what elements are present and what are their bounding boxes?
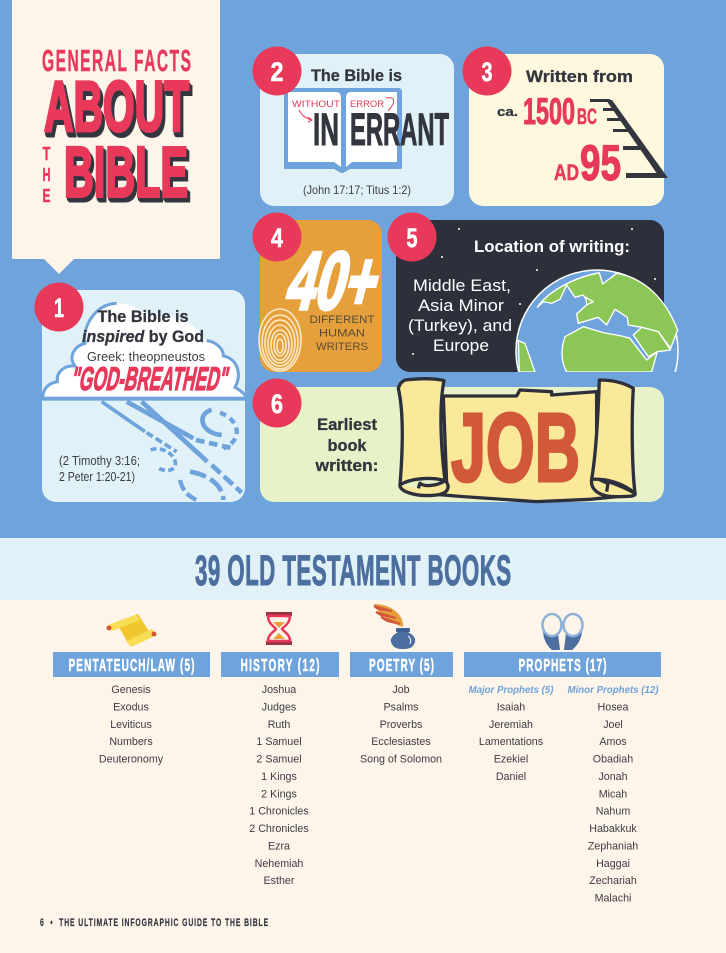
scroll illustration [398, 379, 635, 502]
list: pentateuch books: Exodus [113, 701, 149, 713]
column header: prophets [464, 652, 661, 677]
list: major prophets: Daniel [496, 771, 526, 783]
list: minor prophets: Joel [603, 719, 623, 731]
list: history books: Ezra [268, 840, 290, 852]
panel 6: earliest book [252, 378, 664, 502]
badge 4 [252, 212, 302, 262]
list: pentateuch books: Leviticus [110, 719, 152, 731]
list: minor prophets: Minor Prophets (12) [568, 684, 659, 696]
locations: (Turkey), and [408, 316, 512, 335]
list: major prophets: Lamentations [479, 736, 543, 748]
label [314, 415, 378, 475]
without error handwriting [292, 98, 394, 122]
heading: inspired by God [82, 327, 204, 346]
background: cream lower section [0, 600, 726, 953]
inerrant: IN [313, 104, 339, 155]
end date: AD [554, 160, 579, 185]
list: poetry books: Song of Solomon [360, 754, 442, 766]
cloud illustration [42, 303, 247, 401]
list: poetry books: Psalms [383, 701, 419, 713]
different human writers [310, 314, 375, 353]
greek term: Greek: theopneustos [87, 349, 205, 364]
badge 1 [34, 282, 84, 332]
list: poetry books: Ecclesiastes [371, 736, 431, 748]
list: major prophets: Major Prophets (5) [468, 684, 554, 696]
icon: fingerprint [259, 309, 301, 371]
list: pentateuch books: Genesis [111, 684, 151, 696]
list: minor prophets: Jonah [598, 771, 628, 783]
panel 3: written from [462, 46, 668, 206]
without error handwriting: ERROR [350, 99, 384, 110]
list: poetry books [360, 684, 442, 766]
title: bible [64, 134, 191, 217]
title: bible: BIBLE [66, 137, 190, 216]
title: general facts: GENERAL FACTS [42, 44, 191, 79]
list: history books: Esther [264, 875, 295, 887]
locations: Middle East, [413, 276, 511, 295]
list: history books: Joshua [262, 684, 296, 696]
title panel [12, 0, 220, 274]
badge 1: 1 [54, 293, 64, 323]
list: minor prophets: Zephaniah [588, 840, 638, 852]
title: about: ABOUT [45, 71, 190, 150]
title: about: ABOUT [46, 72, 191, 152]
open book icon [284, 88, 402, 173]
different human writers: HUMAN [319, 328, 365, 340]
column header: history [221, 652, 339, 677]
list: history books: 1 Kings [261, 771, 297, 783]
list: minor prophets: Hosea [598, 701, 628, 713]
column header: poetry: POETRY (5) [369, 656, 434, 676]
list: history books: 1 Chronicles [249, 806, 309, 818]
list: minor prophets [568, 684, 659, 904]
timeline ruler [590, 99, 668, 178]
wind lines [102, 402, 242, 500]
stars [412, 228, 656, 355]
list: history books: 2 Chronicles [249, 823, 309, 835]
title: the: T [42, 144, 50, 164]
title: about: ABOUT [44, 68, 189, 147]
badge 3: 3 [482, 57, 492, 87]
inerrant [313, 104, 449, 155]
panel 2: inerrant [252, 46, 454, 206]
heading: Location of writing: [474, 237, 630, 256]
column header: pentateuch [53, 652, 210, 677]
list: poetry books: Proverbs [380, 719, 422, 731]
heading: The Bible is [98, 307, 188, 326]
start date: 1500 [523, 91, 575, 132]
list: minor prophets: Haggai [596, 858, 630, 870]
references [59, 454, 140, 484]
list: history books: Judges [262, 701, 296, 713]
list: pentateuch books: Numbers [109, 736, 153, 748]
badge 2 [252, 46, 302, 96]
list: history books [249, 684, 309, 887]
heading: The Bible is [311, 66, 402, 85]
job: JOB [451, 393, 580, 502]
column header: pentateuch: PENTATEUCH/LAW (5) [69, 656, 195, 676]
inerrant: ERRANT [350, 104, 449, 155]
list: poetry books: Job [392, 684, 410, 696]
list: minor prophets: Malachi [595, 892, 631, 904]
heading: Written from [526, 67, 633, 86]
title: bible: BIBLE [67, 138, 191, 217]
end date: 95 [580, 135, 621, 191]
list: history books: Ruth [268, 719, 290, 731]
icon: scroll [106, 614, 157, 647]
badge 3 [462, 46, 512, 96]
list: history books: 1 Samuel [256, 736, 302, 748]
badge 4: 4 [271, 223, 283, 253]
title: the: H [42, 165, 50, 185]
start date: ca. [497, 104, 518, 119]
references: (2 Timothy 3:16; [59, 454, 140, 468]
god-breathed: "GOD-BREATHED" [68, 361, 232, 398]
list: history books: 2 Samuel [256, 754, 302, 766]
list: major prophets: Jeremiah [489, 719, 533, 731]
list: minor prophets: Micah [599, 788, 627, 800]
column header: history: HISTORY (12) [241, 656, 320, 676]
heading [82, 307, 204, 346]
icon: quill and inkwell [374, 604, 415, 649]
start date: BC [577, 104, 597, 129]
label: Earliest [317, 415, 377, 434]
start date [497, 91, 597, 132]
badge 5: 5 [406, 223, 418, 253]
badge 6: 6 [271, 389, 283, 419]
different human writers: DIFFERENT [310, 314, 375, 326]
list: history books: Nehemiah [255, 858, 303, 870]
without error handwriting: WITHOUT [292, 99, 340, 110]
title: the: E [42, 186, 50, 206]
list: minor prophets: Habakkuk [589, 823, 637, 835]
background: pale blue heading band [0, 538, 726, 600]
panel 1: inspired by God [34, 282, 247, 502]
list: major prophets: Isaiah [497, 701, 525, 713]
background: blue upper section [0, 0, 726, 538]
title: about: ABOUT [47, 73, 192, 152]
icon: hourglass [266, 612, 292, 645]
badge 5 [388, 212, 436, 262]
list: minor prophets: Obadiah [593, 754, 633, 766]
title: bible: BIBLE [65, 136, 189, 215]
label: book [328, 436, 367, 455]
panel 5: location [388, 212, 679, 372]
title: bible: BIBLE [64, 134, 188, 212]
column header: prophets: PROPHETS (17) [519, 656, 607, 676]
globe [515, 269, 679, 372]
footer: 6 • THE ULTIMATE INFOGRAPHIC GUIDE TO THE BIBLE [40, 916, 268, 928]
locations: Europe [433, 336, 489, 355]
40+: 40+ [279, 235, 390, 327]
section heading: 39 OLD TESTAMENT BOOKS [195, 547, 511, 595]
locations: Asia Minor [418, 296, 504, 315]
different human writers: WRITERS [316, 341, 368, 353]
label: written: [314, 456, 378, 475]
references: 2 Peter 1:20-21) [59, 470, 135, 484]
icon: binoculars [542, 614, 582, 650]
list: minor prophets: Zechariah [589, 875, 637, 887]
locations [408, 276, 512, 355]
list: minor prophets: Nahum [596, 806, 630, 818]
badge 6 [252, 378, 302, 428]
list: minor prophets: Amos [599, 736, 627, 748]
title: about [44, 68, 192, 152]
panel 4: writers [252, 212, 390, 372]
column header: poetry [350, 652, 453, 677]
list: major prophets [468, 684, 554, 783]
list: history books: 2 Kings [261, 788, 297, 800]
list: major prophets: Ezekiel [494, 754, 528, 766]
reference: (John 17:17; Titus 1:2) [303, 183, 411, 197]
list: pentateuch books: Deuteronomy [99, 754, 164, 766]
title: the [42, 144, 50, 206]
list: pentateuch books [99, 684, 164, 766]
end date [554, 135, 621, 191]
badge 2: 2 [270, 57, 284, 87]
